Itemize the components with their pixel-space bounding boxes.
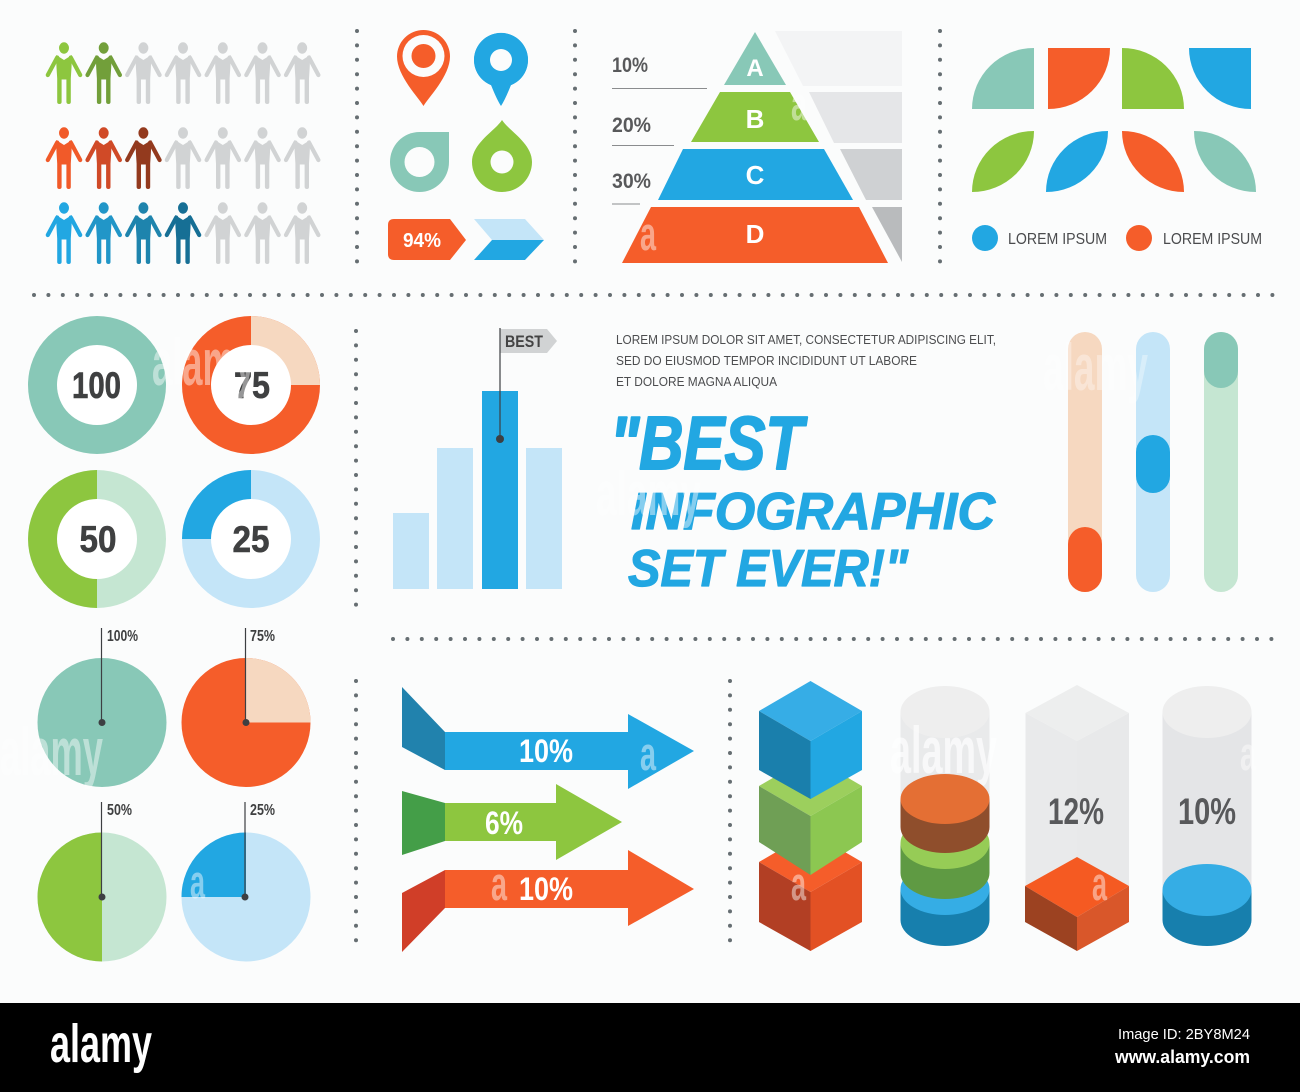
footer url: www.alamy.com: [1114, 1047, 1250, 1067]
watermarks: a: [190, 855, 205, 908]
arrow: blue 10%: [402, 687, 694, 789]
icon: green drop: [472, 120, 532, 192]
pie 100%: [38, 628, 166, 787]
donut 50: [28, 470, 166, 608]
flag: best: BEST: [505, 332, 544, 351]
watermarks: a: [491, 857, 508, 910]
text block: lorem ipsum: SED DO EIUSMOD TEMPOR INCIDIDUNT UT LABORE: [616, 354, 917, 368]
heading: best infographic set ever: [610, 401, 996, 598]
pyramid tier C: C: [746, 160, 765, 190]
watermarks: [0, 77, 1257, 910]
panel: petal shapes: [972, 48, 1256, 192]
watermarks: a: [791, 857, 806, 910]
cylinder: orange: [900, 774, 990, 853]
ghost cylinder: [900, 686, 990, 800]
panel: map pins and tags: [388, 30, 544, 260]
slider: teal: [1204, 332, 1238, 592]
donut 25: 25: [232, 519, 270, 560]
pyramid tier D: D: [746, 219, 764, 249]
watermarks: alamy: [0, 714, 103, 790]
donut 75: [182, 316, 320, 454]
pyramid tier B: [691, 92, 819, 142]
icon: chevron: [474, 219, 544, 260]
watermarks: a: [791, 77, 808, 130]
chart: stacked isometric cylinders: [890, 686, 997, 946]
pyramid tier A: [724, 32, 786, 85]
pie 25%: [182, 802, 310, 962]
cube: blue: [759, 681, 862, 799]
pyramid grey shadows: [775, 31, 902, 262]
watermarks: a: [1240, 727, 1257, 780]
panel: ribbon arrows: [402, 687, 694, 952]
panel: donut gauges: [28, 316, 320, 608]
watermarks: a: [640, 207, 657, 260]
arrow: orange 10%: [402, 850, 694, 952]
donut 100: [28, 316, 166, 454]
people row: blue 4 of 7: [48, 202, 318, 264]
flag: best: [496, 328, 557, 443]
chart: isometric box 12%: 12%: [1048, 791, 1104, 832]
panel: vertical sliders: [1068, 332, 1238, 592]
chart: isometric box 12%: [1025, 685, 1129, 951]
cylinder: green: [900, 817, 990, 899]
watermark on cylinder: alamy: [890, 713, 997, 787]
watermarks: a: [1092, 857, 1107, 910]
heading: best infographic set ever: "BEST: [610, 401, 808, 485]
pie 50%: [38, 802, 166, 962]
chart: stacked isometric cubes: [759, 681, 862, 951]
tag: 94%: 94%: [403, 230, 441, 252]
slider: orange: [1068, 332, 1102, 592]
people row: green 2 of 7: [48, 42, 318, 104]
pyramid labels: [612, 54, 707, 204]
text block: lorem ipsum: [616, 333, 996, 389]
tag: 94%: [388, 219, 466, 260]
cube: orange: [759, 832, 862, 951]
pyramid labels: 20%: [612, 114, 651, 137]
people row: orange 3 of 7: [48, 127, 318, 189]
panel: pie charts: [38, 628, 310, 962]
arrow: orange 10%: 10%: [519, 871, 573, 907]
arrow: green 6%: [402, 784, 622, 860]
icon: blue map pin: [474, 33, 528, 106]
donut 25: [182, 470, 320, 608]
pyramid tier B: B: [746, 104, 764, 134]
pie 75%: 75%: [250, 628, 275, 645]
icon: teal drop: [390, 132, 449, 192]
legend: [972, 225, 1262, 251]
legend: LOREM IPSUM: [1008, 231, 1107, 248]
legend: LOREM IPSUM: [1163, 231, 1262, 248]
slider: blue: [1136, 332, 1170, 592]
donut 100: 100: [72, 365, 121, 406]
panel: people pictograms: [48, 42, 318, 264]
chart: pyramid: [612, 31, 902, 263]
watermarks: alamy: [152, 325, 255, 399]
chart: bar chart with best flag: [393, 328, 562, 589]
donut 50: 50: [80, 519, 116, 560]
pie 50%: 50%: [107, 802, 132, 819]
arrow: blue 10%: 10%: [519, 733, 573, 769]
cylinder: blue: [900, 863, 990, 946]
chart: isometric cylinder 10%: [1162, 686, 1252, 946]
cube: green: [759, 756, 862, 875]
watermarks: alamy: [1043, 330, 1148, 404]
heading: best infographic set ever: INFOGRAPHIC: [631, 483, 996, 541]
pie 100%: 100%: [107, 628, 138, 645]
text block: lorem ipsum: ET DOLORE MAGNA ALIQUA: [616, 375, 778, 389]
watermarks: alamy: [596, 460, 701, 529]
heading: best infographic set ever: SET EVER!": [628, 540, 909, 598]
donut 75: 75: [234, 365, 270, 406]
pyramid tier A: A: [746, 55, 764, 82]
footer logo: alamy: [50, 1014, 152, 1074]
pyramid labels: 30%: [612, 170, 651, 193]
pyramid tier D: [622, 207, 888, 263]
text block: lorem ipsum: LOREM IPSUM DOLOR SIT AMET, CONSECTETUR ADIPISCING ELIT,: [616, 333, 996, 347]
pyramid tier C: [658, 149, 853, 200]
watermarks: a: [640, 727, 657, 780]
footer bar: [0, 1003, 1300, 1092]
pie 75%: [182, 628, 310, 787]
arrow: green 6%: 6%: [485, 805, 523, 841]
footer image id: Image ID: 2BY8M24: [1118, 1026, 1250, 1043]
icon: orange map pin: [397, 30, 450, 106]
pyramid labels: 10%: [612, 54, 648, 77]
chart: isometric cylinder 10%: 10%: [1178, 791, 1236, 832]
pie 25%: 25%: [250, 802, 275, 819]
